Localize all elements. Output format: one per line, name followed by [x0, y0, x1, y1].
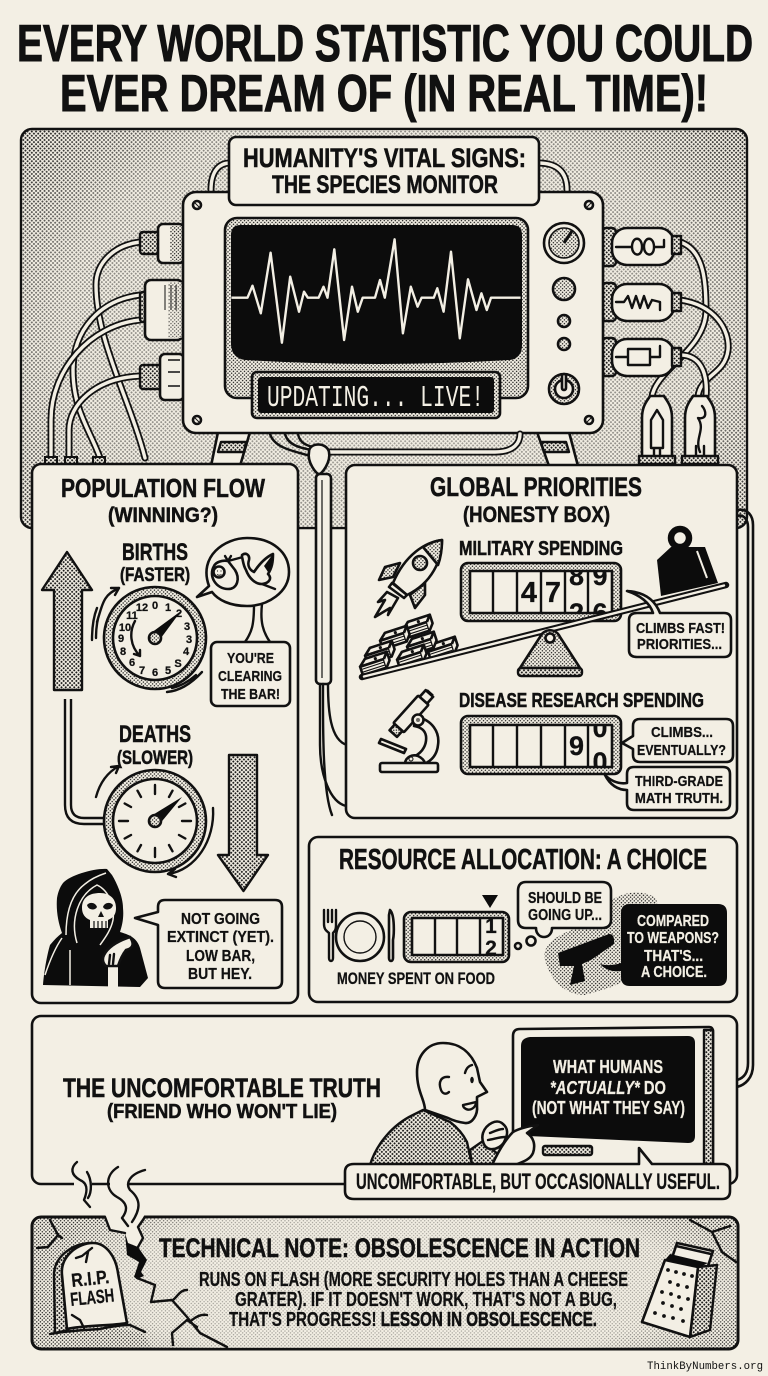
computer monitor	[513, 1027, 713, 1166]
heading	[430, 472, 642, 527]
gauge: births: 7	[139, 665, 145, 677]
callout: compared to weapons: COMPARED	[637, 913, 709, 930]
icon: fulcrum	[518, 630, 582, 676]
body text: THAT'S PROGRESS! LESSON IN OBSOLESCENCE.	[229, 1309, 597, 1331]
black screen text	[521, 1036, 695, 1143]
heading: (WINNING?)	[108, 504, 218, 527]
icon: rocket	[375, 540, 442, 617]
callout: third-grade math truth	[605, 767, 730, 810]
pipe from deaths dial to up arrow	[65, 699, 104, 824]
LCD status readout: UPDATING... LIVE!	[267, 381, 484, 416]
callout: not going extinct: LOW BAR,	[186, 948, 255, 965]
gauge: births	[92, 587, 206, 692]
callout: compared to weapons: TO WEAPONS?	[627, 930, 719, 947]
right bulbs	[602, 228, 681, 376]
arrow: up	[42, 552, 92, 690]
header plate: THE SPECIES MONITOR	[272, 171, 498, 199]
tube plugs	[45, 457, 105, 465]
gauge: deaths	[96, 766, 213, 877]
gauge: births: 12	[136, 602, 148, 614]
heading: (FRIEND WHO WON'T LIE)	[107, 1101, 337, 1123]
icon: weight	[657, 529, 718, 596]
heading: GLOBAL PRIORITIES	[430, 472, 642, 502]
label: military spending: MILITARY SPENDING	[459, 538, 623, 560]
gauge: births: 10	[119, 622, 131, 634]
gauge: births: S	[174, 658, 182, 670]
panel: technical note	[32, 1162, 738, 1349]
gauge: births: 11	[126, 610, 138, 622]
callout: compared to weapons: THAT'S...	[644, 948, 703, 965]
icon: cash pile	[358, 615, 459, 675]
births heading	[120, 539, 190, 586]
bottom glass bulbs	[639, 396, 718, 464]
left connectors	[140, 224, 184, 400]
callout: compared to weapons	[600, 904, 727, 986]
gauge: births: 9	[118, 633, 124, 645]
counter: disease research spending: 0	[592, 747, 608, 777]
thought bubble	[515, 882, 611, 949]
panel: the uncomfortable truth	[32, 1016, 737, 1199]
counter: disease research spending	[461, 713, 621, 777]
gauge: births: 3	[186, 634, 192, 646]
credit: ThinkByNumbers.org	[647, 1361, 763, 1373]
label: disease research spending: DISEASE RESEARCH SPENDING	[459, 690, 704, 712]
callout: clearing the bar: YOU'RE	[227, 650, 274, 667]
counter: military spending: 8	[569, 561, 584, 591]
body text: RUNS ON FLASH (MORE SECURITY HOLES THAN A CHEESE	[199, 1269, 628, 1291]
speech bubble: stork	[197, 538, 289, 642]
counter: military spending: 7	[545, 577, 561, 609]
smoke wisps	[72, 1162, 145, 1226]
callout: climbs fast	[627, 591, 731, 657]
deaths heading: DEATHS	[119, 721, 191, 748]
gauge: births: 4	[183, 646, 190, 658]
callout: climbs fast: CLIMBS FAST!	[636, 620, 725, 637]
black screen text: *ACTUALLY* DO	[550, 1078, 666, 1098]
icon: plate and cutlery	[324, 910, 394, 961]
births heading: (FASTER)	[120, 565, 190, 586]
arrow: down	[218, 755, 268, 891]
callout: compared to weapons: A CHOICE.	[641, 964, 707, 981]
gauge: births: 2	[176, 608, 182, 620]
icon: grim reaper	[43, 869, 148, 988]
screen	[231, 225, 522, 364]
pointer triangle	[482, 895, 498, 908]
ECG trace	[231, 239, 521, 343]
seesaw	[362, 585, 726, 677]
deaths heading: (SLOWER)	[117, 748, 193, 769]
callout: third-grade math truth: MATH TRUTH.	[635, 790, 723, 807]
heading	[63, 1073, 381, 1123]
counter: military spending: 2	[569, 598, 584, 628]
deaths heading	[117, 721, 193, 769]
counter: disease research spending: 0	[592, 713, 608, 743]
heading: POPULATION FLOW	[61, 473, 265, 503]
monitor body	[183, 192, 603, 433]
gauge: births: 0	[152, 600, 158, 612]
icon: stork with bundle	[212, 554, 275, 589]
callout: climbs eventually: EVENTUALLY?	[637, 742, 726, 759]
counter: food	[404, 912, 509, 962]
births heading: BIRTHS	[122, 539, 188, 566]
callout: clearing the bar: THE BAR!	[221, 686, 280, 703]
LCD status readout	[252, 372, 500, 418]
callout: climbs eventually: CLIMBS...	[651, 724, 713, 741]
black screen text: WHAT HUMANS	[553, 1057, 663, 1077]
halftone cloud behind gun	[544, 892, 659, 995]
panel: population flow	[32, 464, 298, 1003]
header plate	[229, 137, 539, 205]
counter: military spending: 6	[592, 598, 608, 628]
label: food: MONEY SPENT ON FOOD	[337, 969, 495, 988]
callout: not going extinct: EXTINCT (YET).	[167, 929, 274, 946]
counter: food: 2	[485, 937, 497, 960]
person pointing at screen	[370, 1043, 538, 1165]
pointing hand	[492, 1125, 538, 1165]
body text: GRATER). IF IT DOESN'T WORK, THAT'S NOT A BUG,	[235, 1289, 617, 1311]
panel: resource allocation	[309, 837, 737, 1002]
gauge: births: 3	[184, 621, 190, 633]
halftone panel	[32, 1217, 738, 1349]
heading: THE UNCOMFORTABLE TRUTH	[63, 1073, 381, 1103]
gravestone: FLASH	[69, 1285, 115, 1311]
icon: microscope	[379, 687, 438, 772]
counter: military spending	[461, 561, 621, 628]
counter: food: 1	[485, 915, 497, 938]
gravestone	[45, 1243, 150, 1347]
heading: TECHNICAL NOTE: OBSOLESCENCE IN ACTION	[159, 1233, 640, 1263]
panel: species monitor	[21, 129, 747, 528]
callout: clearing the bar: CLEARING	[218, 668, 282, 685]
callout: not going extinct: BUT HEY.	[188, 966, 252, 983]
heading: (HONESTY BOX)	[463, 502, 610, 527]
callout: not going extinct: NOT GOING	[181, 911, 260, 928]
callout: third-grade math truth: THIRD-GRADE	[635, 773, 723, 790]
callout: climbs fast: PRIORITIES...	[637, 636, 722, 653]
title	[17, 15, 753, 123]
corner screws	[193, 201, 593, 424]
control dials	[544, 223, 584, 404]
icon: handgun	[558, 934, 614, 985]
icon: cheese grater	[642, 1243, 717, 1337]
screen bezel	[225, 218, 528, 398]
halftone backdrop	[21, 129, 747, 528]
counter: military spending: 9	[592, 561, 608, 591]
gauge: births: 1	[165, 602, 171, 614]
monitor stand legs	[211, 432, 578, 466]
callout: climbs eventually	[622, 719, 733, 762]
body text	[199, 1269, 628, 1331]
thought bubble: GOING UP...	[528, 907, 602, 924]
heading	[61, 473, 265, 527]
callout: clearing the bar	[211, 642, 290, 706]
panel: global priorities	[346, 465, 737, 818]
tubes: left side and right side	[51, 163, 728, 458]
callout: not going extinct	[135, 900, 282, 988]
fist	[482, 1122, 507, 1149]
header plate: HUMANITY'S VITAL SIGNS:	[243, 143, 526, 173]
crack in panel	[37, 1214, 736, 1347]
gauge: births: 6	[129, 657, 135, 669]
counter: disease research spending: 9	[569, 731, 584, 761]
gravestone: R.I.P.	[70, 1267, 110, 1292]
thought bubble: SHOULD BE	[528, 890, 602, 907]
black screen text: (NOT WHAT THEY SAY)	[532, 1098, 685, 1118]
pipe: central cable bundle	[270, 434, 520, 815]
gauge: births: 6	[152, 667, 158, 679]
pipe: right-hand return	[737, 510, 753, 1087]
gauge: births: 8	[120, 646, 126, 658]
gauge: births: 5	[165, 665, 171, 677]
callout: occasionally useful	[345, 1148, 730, 1199]
counter: military spending: 4	[521, 577, 537, 609]
